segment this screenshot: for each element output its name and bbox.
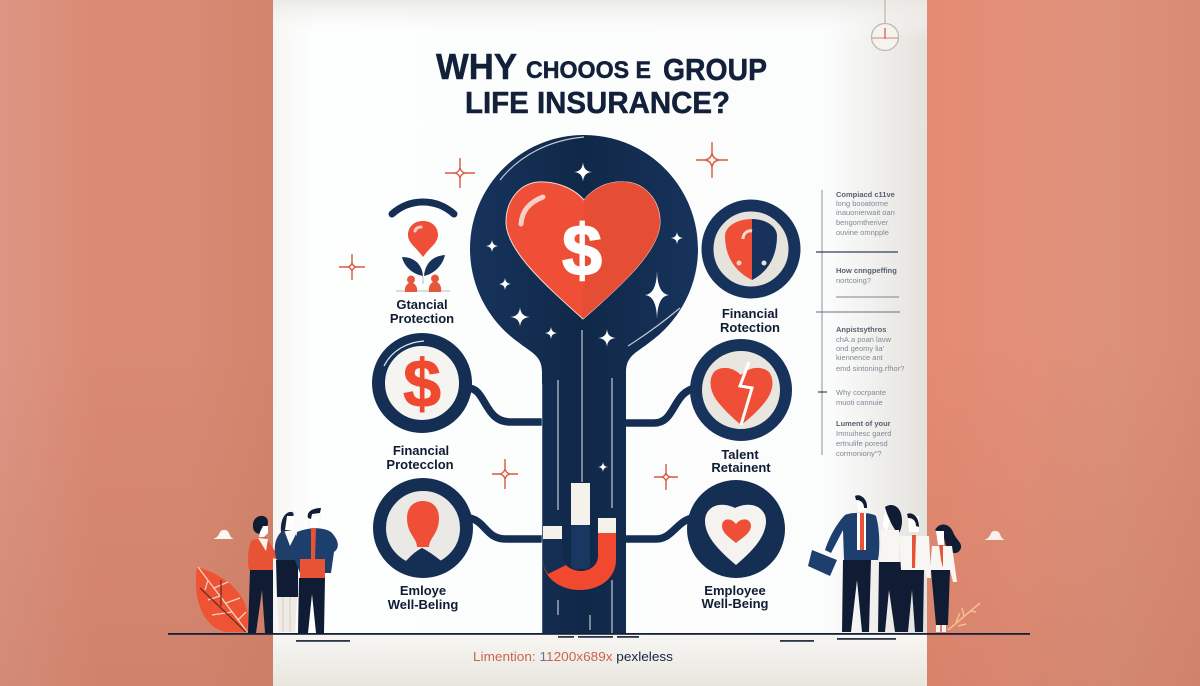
text column right: Why cocrpante [836, 388, 886, 397]
title: GROUP [663, 52, 767, 87]
label: Employee Well-Being [702, 583, 769, 611]
keyhole body [470, 135, 698, 633]
panel: right heart circle [687, 480, 785, 578]
label: Emloye Well-Beling: Emloye [400, 583, 446, 598]
label: Employee Well-Being: Well-Being [702, 596, 769, 611]
ground line [168, 633, 1030, 642]
people group right [808, 495, 980, 632]
people group left [248, 508, 338, 633]
man with orange folder [294, 508, 338, 633]
label: Gtancial Protection [390, 297, 454, 326]
title: LIFE INSURANCE? [465, 85, 730, 120]
icon: magnet [543, 483, 616, 590]
man with briefcase [808, 495, 879, 632]
text column right: bengomtheriver [836, 218, 889, 227]
title [436, 46, 767, 120]
label: Gtancial Protection: Gtancial [396, 297, 448, 312]
sprig [948, 603, 980, 630]
panel: right broken heart circle [696, 345, 786, 435]
footer caption: Limention: 11200x689x pexleless [473, 650, 673, 664]
label: Financial Rotection: Rotection [720, 320, 780, 335]
text column right: Imnuihesc gaerd [836, 429, 891, 438]
icon: white cloud left [213, 530, 234, 539]
label: Gtancial Protection: Protection [390, 311, 454, 326]
label: Employee Well-Being: Employee [704, 583, 766, 598]
label: Emloye Well-Beling: Well-Beling [388, 597, 458, 612]
panel: right shield circle [708, 206, 794, 292]
label: Talent Retainent: Retainent [711, 460, 771, 475]
text column right: kiennence ant [836, 353, 884, 362]
person in navy jacket and skirt [275, 512, 301, 632]
text column right [816, 190, 904, 458]
panel: left dollar circle: $ [403, 346, 441, 422]
title: CHOOOS E [526, 57, 651, 84]
label: Talent Retainent [711, 447, 771, 475]
central keyhole shape [468, 135, 698, 633]
sparkles on keyhole [486, 162, 683, 472]
centre white panel [273, 0, 927, 686]
heart with dollar [506, 182, 660, 319]
heart with dollar: $ [562, 211, 602, 291]
text column right: inauonierwait oan [836, 208, 895, 217]
panel: left top balloon icon [392, 202, 454, 292]
label: Financial Protecclon [386, 443, 454, 472]
text column right: ertnulife poresd [836, 439, 888, 448]
orange sparkles around the keyhole [339, 142, 728, 490]
text column right: cormoniony"? [836, 449, 882, 458]
text column right: Lument of your [836, 419, 891, 428]
text column right: ouvine omnpple [836, 228, 889, 237]
icon: hanging target top right [872, 0, 898, 50]
text column right: long booatorme [836, 199, 888, 208]
text column right: chA.a poan lavw [836, 335, 892, 344]
label: Financial Protecclon: Financial [393, 443, 449, 458]
label: Financial Rotection: Financial [722, 306, 778, 321]
text column right: nortcoing? [836, 276, 871, 285]
left background band [0, 0, 273, 686]
label: Emloye Well-Beling [388, 583, 458, 612]
right background band [927, 0, 1200, 686]
woman with orange tie [929, 524, 961, 632]
text column right: emd sintoning.rfhor? [836, 364, 904, 373]
label: Financial Rotection [720, 306, 780, 335]
text column right: Anpistsythros [836, 325, 886, 334]
edge highlights [500, 137, 680, 633]
icon: white cloud right [984, 531, 1005, 540]
connectors [468, 388, 696, 539]
panel: left dollar circle [378, 340, 466, 426]
icon: orange leaf [196, 567, 248, 632]
person in orange jacket [248, 516, 278, 633]
label: Financial Protecclon: Protecclon [386, 457, 454, 472]
text column right: How cnngpeffing [836, 266, 897, 275]
panel: left bulb circle [380, 484, 466, 572]
text column right: muoti cannuie [836, 398, 883, 407]
text column right: Compiacd c11ve [836, 190, 895, 199]
man with orange tie [899, 513, 931, 632]
title: WHY [436, 46, 517, 87]
label: Talent Retainent: Talent [721, 447, 759, 462]
woman in white shirt [878, 505, 903, 632]
text column right: ond geomy lia' [836, 344, 885, 353]
